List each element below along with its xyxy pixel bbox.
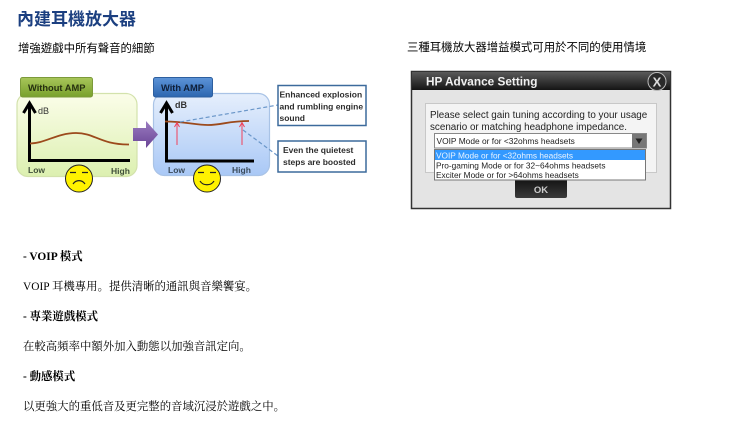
boost arrows	[174, 122, 244, 145]
dialog OK button	[515, 178, 567, 198]
dialog title bar: HP Advance Setting	[426, 74, 537, 88]
panel: without AMP	[17, 78, 137, 176]
panel: with AMP: Low	[168, 165, 185, 175]
callout: quietest steps: Even the quietest	[283, 145, 354, 155]
icon: close button	[648, 72, 666, 90]
subtitle: left: 增強遊戲中所有聲音的細節	[18, 43, 155, 55]
panel: with AMP: High	[232, 165, 251, 175]
heading: exciter mode: - 動感模式	[23, 371, 75, 383]
arrow: purple	[133, 121, 158, 148]
subtitle: right: 三種耳機放大器增益模式可用於不同的使用情境	[407, 42, 646, 54]
dropdown list: Exciter Mode or for >64ohms headsets	[436, 170, 579, 180]
text: VOIP mode: VOIP 耳機專用。提供清晰的通訊與音樂饗宴。	[23, 281, 257, 293]
dialog OK button: OK	[534, 185, 548, 196]
select box	[434, 134, 646, 148]
panel: with AMP	[154, 78, 270, 176]
callout: quietest steps	[278, 141, 366, 172]
callout: enhanced explosion: sound	[280, 113, 305, 123]
panel: with AMP: dB	[175, 100, 187, 110]
dropdown list: VOIP Mode or for <32ohms headsets	[436, 150, 573, 160]
select box: VOIP Mode or for <32ohms headsets	[436, 136, 575, 146]
callout: enhanced explosion: and rumbling engine	[280, 102, 363, 112]
chart axes: without AMP	[24, 103, 130, 160]
text: exciter mode: 以更強大的重低音及更完整的音域沉浸於遊戲之中。	[23, 401, 285, 413]
callout: enhanced explosion	[278, 86, 366, 126]
text: pro-gaming mode: 在較高頻率中額外加入動態以加強音訊定向。	[23, 341, 251, 353]
response curve: with AMP	[165, 121, 249, 125]
icon: happy face	[194, 165, 220, 192]
panel: without AMP: High	[111, 166, 130, 176]
dialog inner panel	[426, 104, 656, 172]
callout: quietest steps: steps are boosted	[283, 157, 356, 167]
label: without AMP: Without AMP	[28, 83, 85, 93]
response curve: without AMP	[30, 133, 129, 144]
leader lines	[180, 105, 278, 156]
dialog title bar	[412, 72, 670, 90]
chart axes: with AMP	[160, 103, 254, 161]
dialog inner panel: Please select gain tuning according to your usage	[430, 110, 648, 121]
panel: without AMP: Low	[28, 165, 45, 175]
label: with AMP: With AMP	[161, 83, 204, 93]
heading: pro-gaming mode: - 專業遊戲模式	[23, 311, 98, 323]
dialog inner panel: scenario or matching headphone impedance.	[430, 122, 627, 133]
dropdown list	[434, 150, 646, 180]
dialog: HP Advance Setting	[412, 72, 670, 208]
icon: sad face	[66, 165, 92, 192]
dropdown list: Pro-gaming Mode or for 32~64ohms headsets	[436, 160, 606, 170]
icon: close button: X	[653, 74, 662, 90]
title: 內建耳機放大器	[17, 10, 136, 29]
callout: enhanced explosion: Enhanced explosion	[280, 90, 362, 100]
panel: without AMP: dB	[38, 106, 49, 116]
heading: VOIP mode: - VOIP 模式	[23, 251, 83, 263]
